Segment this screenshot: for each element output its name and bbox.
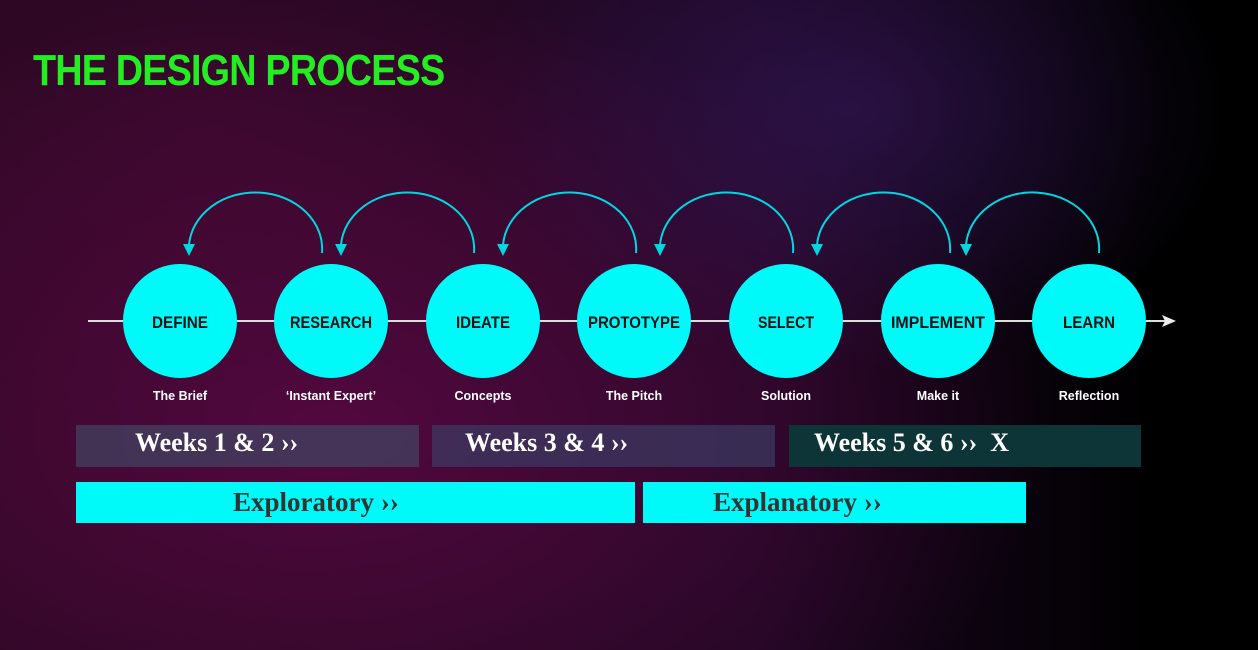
step circles [123,264,1146,378]
exploratory bar [76,482,635,523]
step labels: LEARN [1063,313,1115,332]
weeks 3-4 bar [432,425,775,467]
step sublabels: Concepts [455,389,512,403]
step sublabels: Reflection [1059,389,1119,403]
step sublabels: Make it [917,389,960,403]
timeline axis arrow [88,315,1176,327]
step labels: IDEATE [456,313,510,332]
weeks 1-2 bar: Weeks 1 & 2 ›› [135,428,298,457]
title: THE DESIGN PROCESS [33,46,444,95]
weeks 5-6 bar: Weeks 5 & 6 ›› X [814,428,1009,457]
exploratory bar: Exploratory ›› [233,487,399,517]
weeks 1-2 bar [76,425,419,467]
step sublabels: The Brief [153,389,208,403]
step sublabels [153,389,1119,403]
step labels: IMPLEMENT [891,313,986,332]
step labels: PROTOTYPE [588,313,680,332]
weeks 3-4 bar: Weeks 3 & 4 ›› [465,428,628,457]
weeks 5-6 bar [789,425,1141,467]
step labels [152,313,1115,332]
step labels: SELECT [758,313,815,332]
step labels: RESEARCH [290,313,372,332]
step sublabels: ‘Instant Expert’ [286,389,376,403]
explanatory bar [643,482,1026,523]
step labels: DEFINE [152,313,208,332]
step sublabels: The Pitch [606,389,662,403]
step sublabels: Solution [761,389,811,403]
feedback arcs [189,192,1099,253]
explanatory bar: Explanatory ›› [713,487,882,517]
